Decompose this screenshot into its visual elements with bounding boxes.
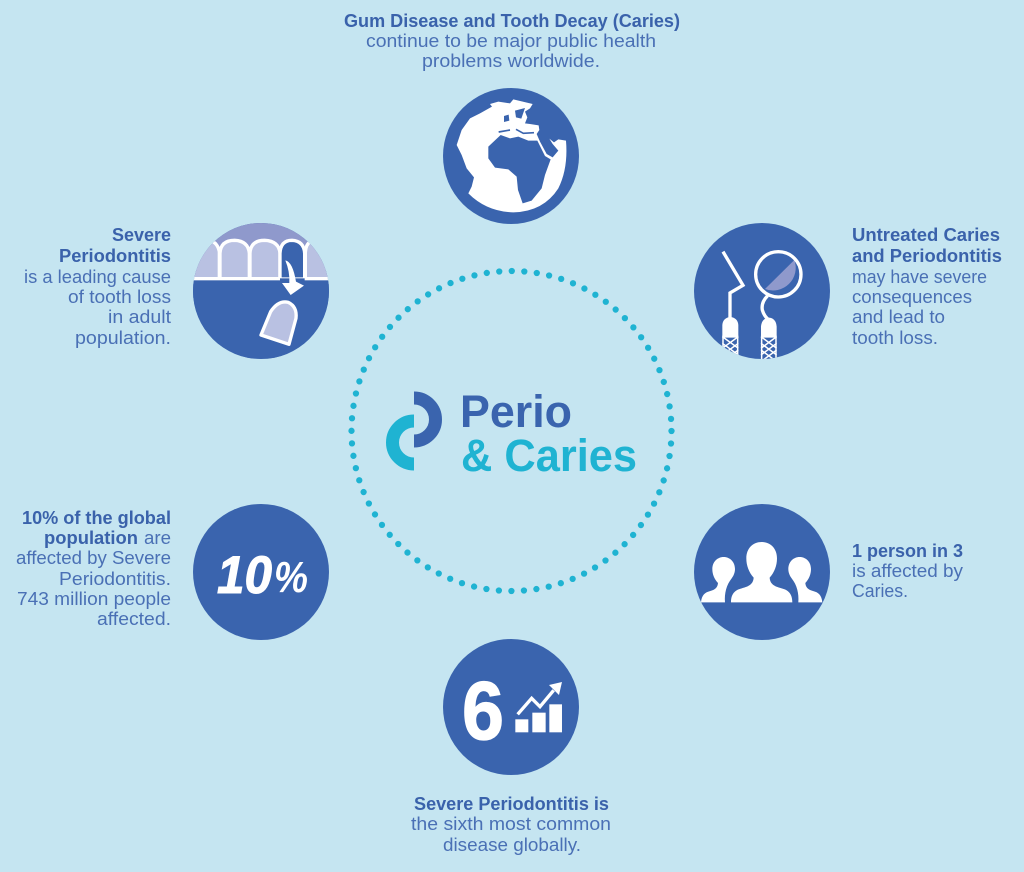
icon: sixth with growth chart [443,639,579,775]
logo word Perio: Perio [460,386,572,437]
text: untreated caries and periodontitis: and lead to [852,306,945,327]
logo mark cyan arc [392,421,414,464]
text: 1 person in 3 [852,540,964,601]
text: severe periodontitis tooth loss: is a leading cause [24,266,171,287]
icon: three people [694,504,830,640]
icon: globe [443,88,579,224]
text: 10 percent of the global population: population [44,527,138,548]
text: 10 percent of the global population: are [144,527,171,548]
dotted ring [352,271,672,591]
text: severe periodontitis tooth loss: population. [75,327,171,348]
text: untreated caries and periodontitis: Untreated Caries [852,224,1000,245]
text: untreated caries and periodontitis: tooth loss. [852,327,938,348]
icon: sixth with growth chart: 6 [462,664,504,757]
text: top statement [344,10,680,71]
text: severe periodontitis tooth loss: Severe [112,224,171,245]
text: sixth most common disease: Severe Periodontitis is [414,793,609,814]
text: 1 person in 3: 1 person in 3 [852,540,963,561]
logo: Perio & Caries [392,386,637,481]
text: sixth most common disease: the sixth most common [411,813,611,834]
text: 10 percent of the global population: 10% of the global [22,507,171,528]
logo mark dark arc [414,398,436,441]
text: severe periodontitis tooth loss: of tooth loss [68,286,171,307]
text: untreated caries and periodontitis: may have severe [852,266,987,287]
text: severe periodontitis tooth loss: Periodontitis [59,245,171,266]
text: 10 percent of the global population: affected by Severe [16,547,171,568]
text: top statement: Gum Disease and Tooth Decay (Caries) [344,10,680,31]
text: top statement: problems worldwide. [422,50,600,71]
icon: 10 percent: % [274,553,308,602]
icon: 10 percent [193,504,329,640]
text: untreated caries and periodontitis: consequences [852,286,972,307]
text: untreated caries and periodontitis [852,224,1002,348]
text: top statement: continue to be major public health [366,30,656,51]
text: severe periodontitis tooth loss: in adult [108,306,171,327]
icon: dental tools [694,223,830,362]
text: 10 percent of the global population [16,507,171,629]
text: sixth most common disease: disease globally. [443,834,581,855]
text: sixth most common disease [411,793,611,855]
text: severe periodontitis tooth loss [24,224,171,348]
text: untreated caries and periodontitis: and Periodontitis [852,245,1002,266]
text: 10 percent of the global population: affected. [97,608,171,629]
logo word Caries: & Caries [461,430,637,481]
text: 10 percent of the global population: 743 million people [17,588,171,609]
icon: tooth loss [193,223,329,359]
text: 10 percent of the global population: Periodontitis. [59,568,171,589]
text: 1 person in 3: Caries. [852,580,908,601]
icon: 10 percent: 10 [217,546,272,605]
text: 1 person in 3: is affected by [852,560,964,581]
